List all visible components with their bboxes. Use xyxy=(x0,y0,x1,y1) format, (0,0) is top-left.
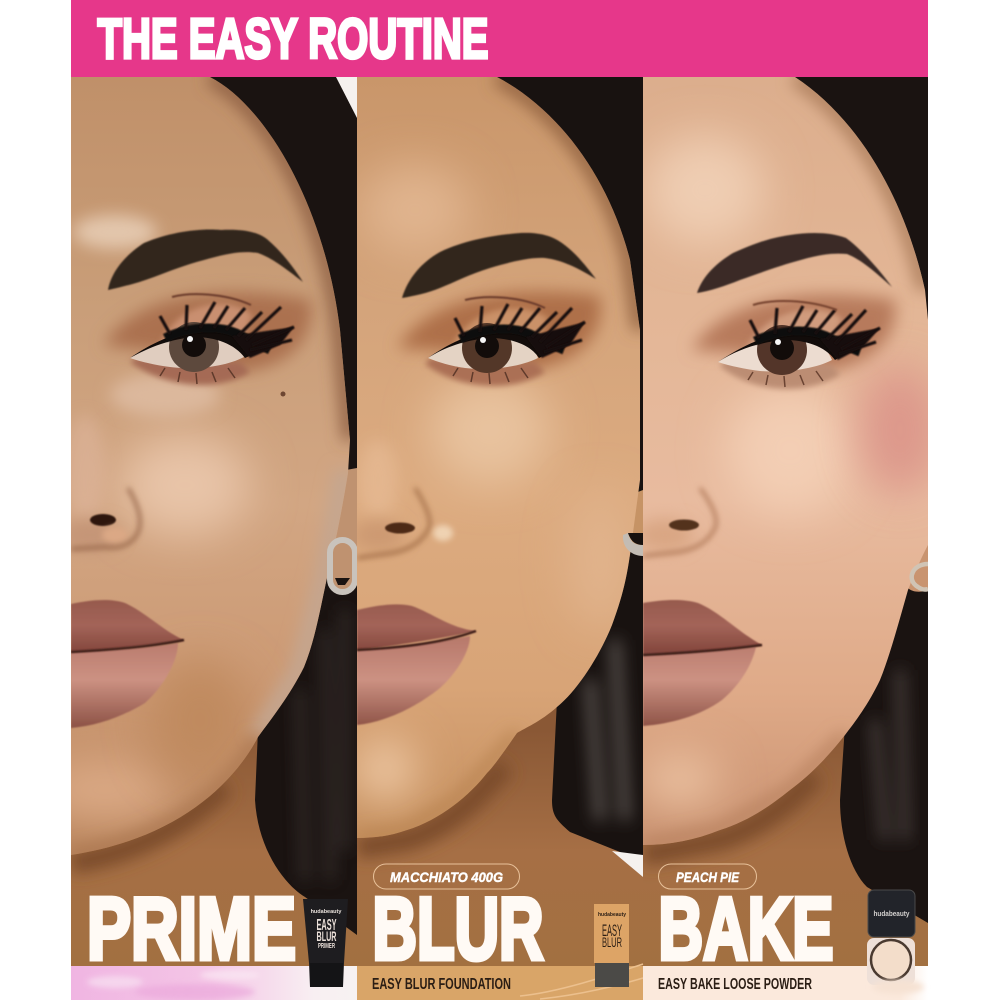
eyebrow xyxy=(402,233,596,298)
eyeshadow xyxy=(104,292,311,385)
heading: blur: BLUR xyxy=(372,879,544,978)
neck xyxy=(643,736,928,966)
product: powder jar: hudabeauty xyxy=(874,909,910,918)
earring xyxy=(912,564,928,590)
nose xyxy=(352,488,453,558)
eyebrow xyxy=(697,233,892,293)
ear xyxy=(632,490,643,545)
lips xyxy=(71,600,184,728)
product: powder jar xyxy=(867,890,924,994)
neck xyxy=(71,738,357,966)
hair xyxy=(497,77,643,855)
face skin xyxy=(355,77,647,847)
white corner xyxy=(612,851,643,877)
jaw shadow xyxy=(643,775,815,855)
product: primer tube: EASY xyxy=(316,917,337,934)
heading: prime: PRIME xyxy=(87,879,296,978)
nose xyxy=(637,488,716,556)
heading: bake: BAKE xyxy=(658,879,834,978)
product name: foundation: EASY BLUR FOUNDATION xyxy=(372,976,511,993)
shade pill: macchiato: MACCHIATO 400G xyxy=(390,869,503,885)
ear xyxy=(333,468,357,589)
eyeshadow xyxy=(692,294,896,389)
panel: blur xyxy=(352,77,647,1000)
title: THE EASY ROUTINE xyxy=(98,7,488,71)
earring xyxy=(330,540,355,592)
earring xyxy=(623,533,643,556)
neck xyxy=(357,707,643,966)
product: foundation tube xyxy=(594,904,629,987)
product name: powder: EASY BAKE LOOSE POWDER xyxy=(658,976,812,993)
jaw shadow xyxy=(71,785,225,863)
eyeshadow xyxy=(398,291,601,386)
hair xyxy=(210,77,357,935)
panel: prime xyxy=(71,77,357,966)
footer strip: prime xyxy=(71,966,357,1000)
title banner xyxy=(71,0,928,77)
footer strip: blur xyxy=(357,964,643,1000)
product: foundation tube: EASY xyxy=(602,921,622,940)
product: primer tube xyxy=(303,899,348,987)
nose xyxy=(60,488,140,551)
panel: bake xyxy=(637,77,942,1000)
eye xyxy=(428,297,585,384)
footer strip: bake xyxy=(643,966,928,1000)
product: primer tube: BLUR xyxy=(316,928,336,944)
face skin xyxy=(640,77,942,852)
eye xyxy=(130,294,294,384)
jaw shadow xyxy=(357,765,505,848)
hair xyxy=(795,77,928,923)
product: foundation tube: hudabeauty xyxy=(598,912,626,918)
shade pill: peach pie xyxy=(658,864,756,889)
shade pill: peach pie: PEACH PIE xyxy=(676,869,740,885)
lips xyxy=(643,600,762,726)
product: primer tube: hudabeauty xyxy=(311,909,342,915)
face skin xyxy=(71,77,350,855)
lips xyxy=(357,604,476,725)
eyebrow xyxy=(108,230,303,290)
shade pill: macchiato xyxy=(374,864,520,889)
product: primer tube: PRIMER xyxy=(318,943,335,950)
freckle xyxy=(280,392,286,396)
ear xyxy=(908,545,928,592)
eye xyxy=(718,301,880,387)
product: foundation tube: BLUR xyxy=(602,934,622,950)
